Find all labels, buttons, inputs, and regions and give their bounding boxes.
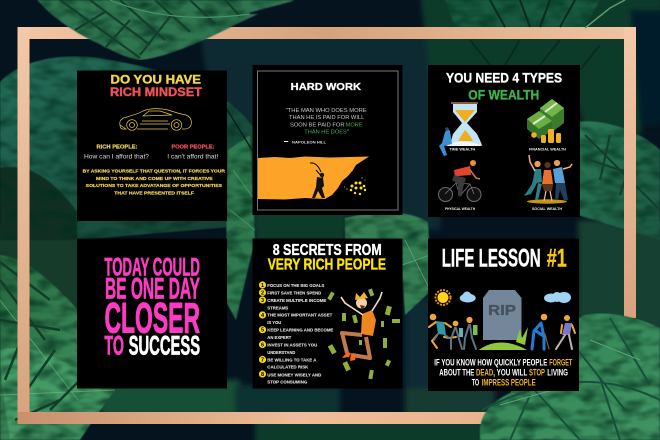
heading: 8 secrets from very rich people — [268, 242, 386, 273]
heading: 8 secrets from very rich people: 8 SECRETS FROM — [273, 242, 382, 259]
foreground leaf: bottom right — [480, 313, 660, 440]
attribution: NAPOLEON HILL — [292, 140, 327, 144]
quote: THAN HE DOES — [304, 130, 347, 136]
caption: IMPRESS PEOPLE — [482, 378, 536, 388]
icon: people walking — [429, 314, 575, 349]
numbered list: 4 — [261, 313, 265, 319]
body text: BY ASKING YOURSELF THAT QUESTION, IT FORCES YOUR — [83, 168, 226, 174]
numbered list: IS YOU — [267, 320, 282, 325]
illustration: miner digging — [258, 156, 369, 200]
panel: hard work — [252, 65, 402, 215]
quote: " — [347, 130, 349, 136]
comparison: rich people and poor people: RICH PEOPLE: — [96, 145, 138, 151]
headline text: BE ONE DAY — [105, 272, 200, 306]
icon: hourglass time wealth — [439, 102, 483, 156]
caption: LIVING — [547, 368, 568, 378]
icon: tombstone rip: RIP — [488, 303, 516, 319]
numbered list: USE MONEY WISELY AND — [267, 372, 322, 377]
label: physical wealth: PHYSICAL WEALTH — [445, 207, 475, 211]
heading: do you have rich mindset — [110, 72, 203, 99]
heading: you need 4 types of wealth: OF WEALTH — [468, 86, 539, 102]
heading: do you have rich mindset: DO YOU HAVE — [110, 72, 201, 86]
heading: you need 4 types of wealth: YOU NEED 4 TYPES — [446, 70, 562, 86]
body text — [83, 168, 226, 196]
panel: rich mindset — [77, 70, 227, 221]
numbered list: 2 — [261, 290, 264, 296]
heading: 8 secrets from very rich people: VERY RICH PEOPLE — [268, 256, 386, 273]
body text: SOLUTIONS TO TAKE ADVATANGE OF OPPORTUNITIES — [86, 183, 223, 189]
label: time wealth: TIME WEALTH — [449, 148, 476, 152]
heading: life lesson #1: #1 — [547, 245, 567, 273]
comparison: rich people and poor people: POOR PEOPLE: — [172, 145, 215, 151]
quote — [286, 108, 367, 136]
numbered list — [259, 281, 333, 385]
quote: SOON BE PAID FOR — [290, 122, 345, 128]
icon: sun — [436, 290, 450, 305]
numbered list: INVEST IN ASSETS YOU — [267, 342, 318, 347]
icon: money stacks financial wealth — [527, 99, 564, 143]
headline text — [104, 254, 200, 361]
numbered list: STOP CONSUMING — [267, 380, 308, 385]
numbered list: 5 — [261, 328, 264, 334]
comparison: rich people and poor people: How can I afford that? — [84, 153, 149, 160]
label: financial wealth: FINANCIAL WEALTH — [529, 148, 566, 152]
label: social wealth: SOCIAL WEALTH — [532, 207, 562, 211]
quote: THAN HE IS PAID FOR WILL — [289, 115, 364, 121]
quote: "THE MAN WHO DOES MORE — [286, 108, 367, 114]
panel: today could be one day closer to success — [77, 238, 227, 388]
icon: car outline — [120, 109, 191, 130]
numbered list: FIRST SAVE THEN SPEND — [267, 290, 322, 295]
caption: , YOU WILL — [493, 368, 528, 378]
heading: hard work: HARD WORK — [291, 81, 361, 93]
headline text: TODAY COULD — [104, 254, 200, 282]
numbered list: 7 — [261, 358, 264, 364]
panel: 8 secrets from very rich people — [252, 238, 402, 388]
heading: do you have rich mindset: RICH MINDSET — [110, 85, 203, 99]
body text: THAT HAVE PRESENTED ITSELF — [114, 190, 194, 196]
heading: life lesson #1: LIFE LESSON — [442, 245, 541, 273]
quote: MORE — [346, 122, 363, 128]
body text: MIND TO THINK AND COME UP WITH CREATIVE — [96, 176, 214, 182]
headline text: TO — [104, 331, 124, 361]
caption: TO — [472, 378, 479, 388]
numbered list: KEEP LEARNING AND BECOME — [267, 328, 333, 333]
comparison: rich people and poor people — [84, 145, 218, 160]
caption: FORGET — [549, 358, 572, 368]
icon: cyclist physical wealth — [438, 160, 481, 202]
numbered list: 8 — [261, 372, 264, 378]
foreground leaf: top right — [445, 0, 625, 28]
icon: friends social wealth — [524, 155, 572, 204]
panel: four types of wealth — [428, 65, 580, 217]
illustration: jumping man with money — [327, 288, 400, 379]
numbered list: FOCUS ON THE BIG GOALS — [267, 283, 324, 288]
numbered list: STREAMS — [267, 305, 288, 310]
caption: STOP — [529, 368, 545, 378]
numbered list: AN EXPERT — [267, 335, 291, 340]
panel: life lesson #1 — [428, 238, 579, 391]
icon: clouds — [460, 292, 571, 303]
numbered list: CALCULATED RISK — [267, 365, 309, 370]
headline text: CLOSER — [104, 294, 200, 342]
heading: you need 4 types of wealth — [446, 70, 562, 102]
caption: ABOUT THE — [439, 368, 474, 378]
caption — [434, 358, 572, 388]
numbered list: 1 — [261, 283, 264, 289]
comparison: rich people and poor people: I can't afford that! — [167, 153, 218, 160]
icon: tombstone rip — [478, 290, 528, 350]
numbered list: UNDERSTAND — [267, 350, 296, 355]
caption: IF YOU KNOW HOW QUICKLY PEOPLE — [434, 358, 547, 368]
foreground leaf: top — [37, 0, 295, 60]
caption: DEAD — [476, 368, 493, 378]
numbered list: CREATE MULTIPLE INCOME — [267, 298, 326, 303]
numbered list: BE WILLING TO TAKE A — [267, 357, 317, 362]
numbered list: 3 — [261, 298, 264, 304]
numbered list: 6 — [261, 342, 264, 348]
numbered list: THE MOST IMPORTANT ASSET — [267, 313, 332, 318]
headline text: SUCCESS — [129, 331, 200, 361]
attribution — [284, 140, 327, 144]
